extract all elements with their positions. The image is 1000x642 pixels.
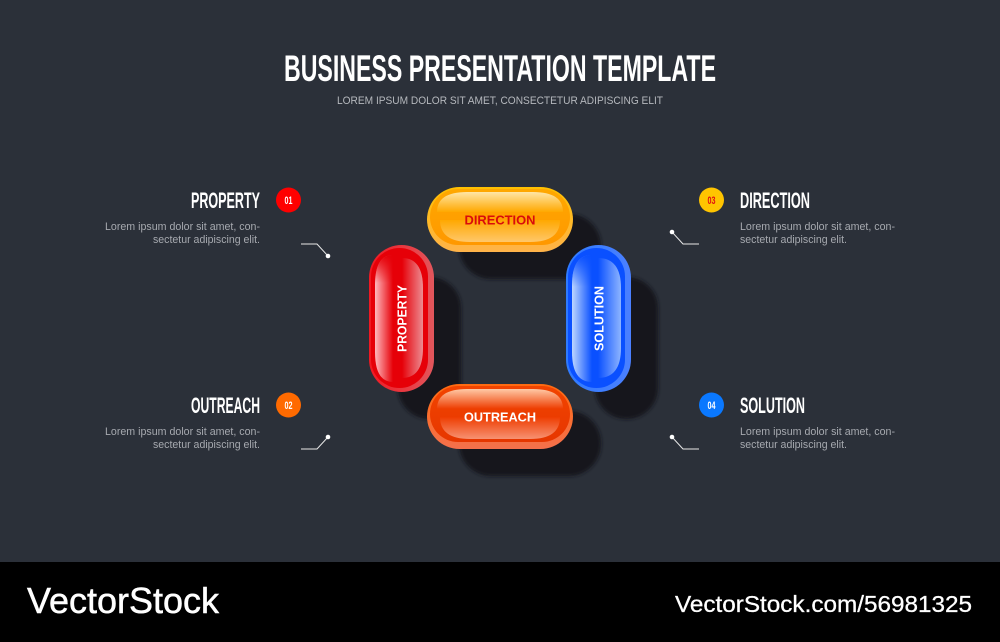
pill drop shadows	[398, 214, 658, 476]
footer watermark band: VectorStock	[27, 580, 220, 621]
footer watermark band: VectorStock.com/56981325	[675, 591, 972, 617]
callout: property: sectetur adipiscing elit.	[153, 234, 260, 246]
subtitle: LOREM IPSUM DOLOR SIT AMET, CONSECTETUR ADIPISCING ELIT	[337, 95, 663, 107]
pill: outreach	[427, 384, 573, 449]
callout: outreach	[105, 392, 330, 451]
callout: direction: sectetur adipiscing elit.	[740, 234, 847, 246]
footer watermark band	[0, 562, 1000, 642]
callout: direction: 03	[708, 195, 716, 207]
callout: solution: sectetur adipiscing elit.	[740, 439, 847, 451]
callout: direction	[670, 188, 895, 246]
callout: solution: 04	[708, 400, 716, 412]
title: BUSINESS PRESENTATION TEMPLATE	[284, 48, 716, 89]
callout: property: 01	[284, 195, 292, 207]
callout: outreach: Lorem ipsum dolor sit amet, con-	[105, 426, 260, 438]
callout: property: PROPERTY	[191, 188, 260, 213]
callout: solution: SOLUTION	[740, 393, 805, 418]
callout: property: Lorem ipsum dolor sit amet, con-	[105, 221, 260, 233]
pill: direction	[427, 187, 573, 252]
callout: outreach: sectetur adipiscing elit.	[153, 439, 260, 451]
callout: property	[105, 188, 330, 258]
pill: property	[369, 245, 434, 392]
callout: solution	[670, 392, 895, 451]
callout: solution: Lorem ipsum dolor sit amet, con-	[740, 426, 895, 438]
pill: solution	[566, 245, 631, 392]
callout: outreach: 02	[284, 400, 292, 412]
pill: property: PROPERTY	[394, 285, 410, 352]
pill: direction: DIRECTION	[464, 212, 536, 228]
pill: outreach: OUTREACH	[464, 410, 536, 424]
callout: direction: DIRECTION	[740, 188, 810, 213]
callout: outreach: OUTREACH	[191, 393, 260, 418]
callout: direction: Lorem ipsum dolor sit amet, con-	[740, 221, 895, 233]
pill: solution: SOLUTION	[592, 286, 606, 351]
